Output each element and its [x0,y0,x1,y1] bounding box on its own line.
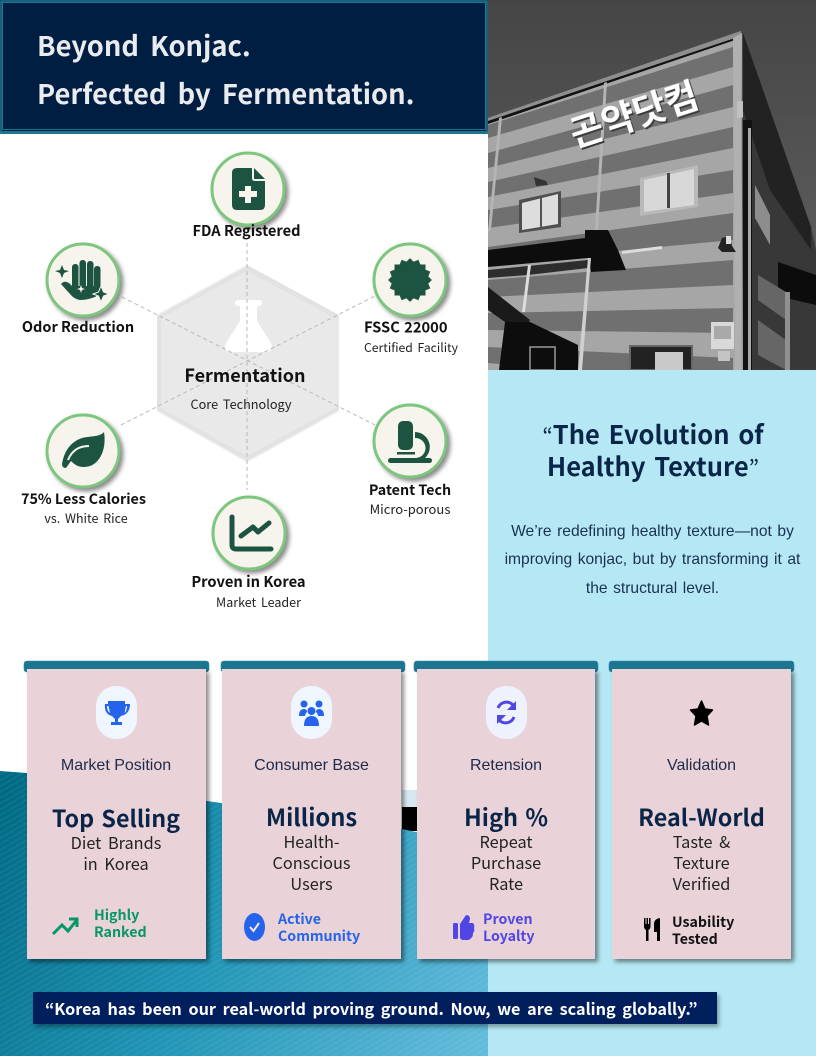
headline: evolution of healthy texture: Healthy Texture” [547,447,759,484]
card description: Users [290,871,333,895]
node: 75% Less Calories [21,415,146,527]
badge text: Highly [94,905,139,925]
label: Odor Reduction [22,316,134,337]
badge icon: thumbs up [453,915,474,940]
photo: Korean sign lettering: 곤약닷컴 [562,67,704,157]
card description: Health- [283,829,340,853]
card description: Repeat [479,829,533,853]
card description: Verified [673,871,730,895]
title line one: Beyond Konjac. [37,24,251,64]
badge text: Community [278,926,360,946]
badge text [672,912,734,949]
sublabel: Market Leader [216,592,301,611]
background: teal wave panel [0,771,488,1056]
title line two: Perfected by Fermentation. [37,72,414,112]
sublabel: Certified Facility [364,338,459,356]
headline: evolution of healthy texture: “The Evolution of [542,415,765,452]
badge text [483,909,535,946]
card label: Retension [470,757,542,774]
title banner [0,0,488,134]
background: light blue right column [488,370,816,1056]
icon: star [690,701,712,725]
card description: Rate [489,871,523,895]
card value: Top Selling [52,800,180,834]
card description: in Korea [83,851,149,875]
card description: Diet Brands [71,830,162,854]
icon: certification seal [388,258,432,302]
card description: Texture [673,850,730,874]
badge text: Usability [672,912,734,932]
icon: flask [225,300,272,352]
node: FDA Registered [193,153,300,241]
badge text [277,909,360,946]
label: 75% Less Calories [21,488,146,509]
label: Patent Tech [369,479,451,500]
card value: Millions [266,799,357,833]
icon: leaf [62,432,105,468]
icon: line chart [232,517,271,549]
sublabel: Micro-porous [370,499,450,518]
card value: High % [464,799,548,833]
body paragraph [505,523,801,597]
label: Proven in Korea [191,571,306,592]
card description [273,829,351,895]
connector lines [121,243,375,490]
card: Retension [414,661,598,959]
card label: Validation [667,757,736,774]
card: Consumer Base [221,661,405,959]
node: FSSC 22000 [364,244,459,356]
badge text: Active [277,909,321,929]
photo: factory building [488,0,816,383]
icon: users [291,686,332,739]
node: Odor Reduction [22,244,134,337]
card description [71,830,162,875]
icon: sync arrows [486,686,527,739]
node: Proven in Korea [191,497,306,611]
card label: Consumer Base [254,757,369,774]
hexagon core: fermentation [121,243,375,490]
card description: Conscious [273,850,351,874]
core title: Fermentation [184,362,306,388]
card description [471,829,541,895]
body paragraph: We’re redefining healthy texture—not by [511,523,794,540]
badge text [94,905,147,942]
body paragraph: improving konjac, but by transforming it at [505,551,801,568]
icon: microscope [388,421,432,463]
badge icon: trending up [53,919,77,934]
label: FDA Registered [193,220,300,241]
headline: evolution of healthy texture [542,415,765,484]
card value: Real-World [638,799,765,833]
card description [673,829,730,895]
badge text: Tested [672,929,718,949]
body paragraph: the structural level. [586,580,719,597]
card description: Purchase [471,850,541,874]
badge text: Ranked [94,922,147,942]
icon: trophy [96,686,137,739]
label: FSSC 22000 [364,316,448,338]
sublabel: vs. White Rice [44,508,128,527]
core subtitle: Core Technology [190,394,292,413]
card: Validation [609,661,794,959]
quote banner: “Korea has been our real-world proving ground. Now, we are scaling globally.” [45,996,698,1020]
badge text: Loyalty [483,926,535,946]
icon: hand with sparkles [55,260,109,302]
badge icon: verified check [244,913,265,941]
node: Patent Tech [369,405,451,518]
card description: Taste & [673,829,730,853]
icon: file plus [232,168,265,210]
card: Market Position [24,661,209,959]
badge text: Proven [483,909,533,929]
card label: Market Position [61,757,171,774]
badge icon: utensils [644,918,660,941]
